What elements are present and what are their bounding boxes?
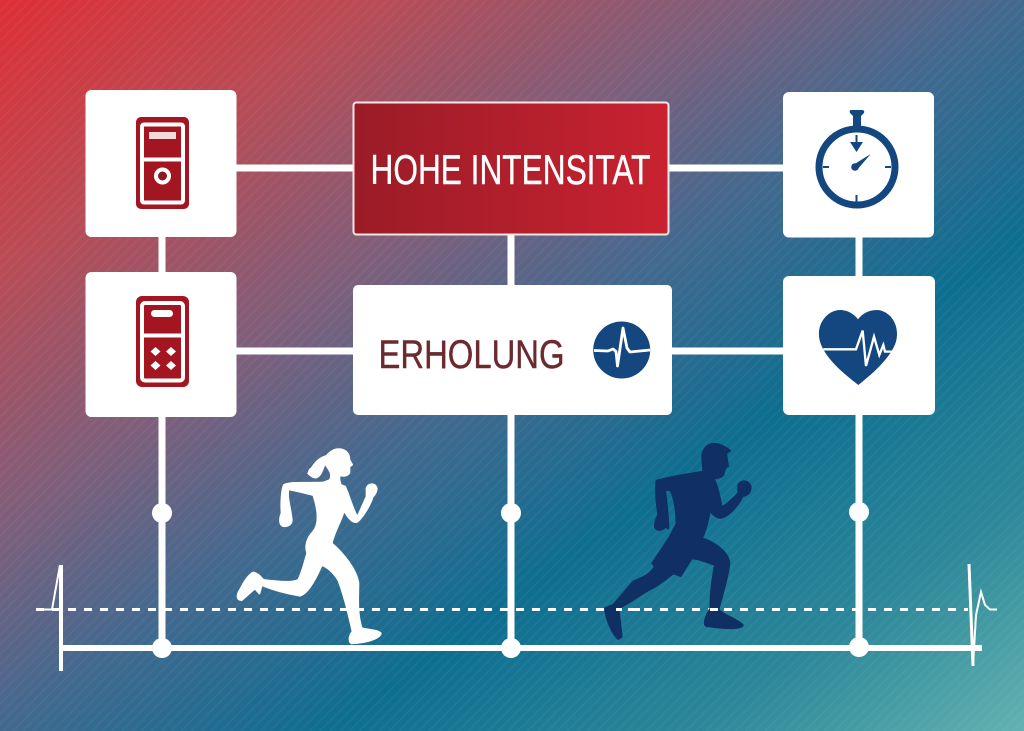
right ECG trace <box>969 564 997 666</box>
icon: stopwatch <box>819 110 895 205</box>
left ECG trace <box>36 565 61 671</box>
panel: high intensity <box>354 102 668 234</box>
icon: calculator device <box>136 296 189 387</box>
panel: calculator device <box>86 272 236 417</box>
baseline dashed <box>36 608 968 611</box>
panel: computer tower <box>86 90 236 237</box>
icon: pulse badge <box>593 322 650 378</box>
dashes crossing the man's legs <box>616 608 718 611</box>
runner: woman <box>238 449 381 643</box>
timeline nodes <box>152 502 869 658</box>
heading: recovery: ERHOLUNG <box>378 333 564 377</box>
panel: stopwatch <box>783 92 934 238</box>
icon: computer tower <box>136 117 189 209</box>
icon: heart with pulse <box>819 310 897 385</box>
panel: heart rate <box>783 276 935 415</box>
connector lines <box>162 168 859 648</box>
panel: recovery <box>353 285 672 415</box>
runner: man <box>605 444 751 639</box>
heading: high intensity: HOHE INTENSITAT <box>370 146 650 193</box>
timeline axis <box>62 502 982 658</box>
